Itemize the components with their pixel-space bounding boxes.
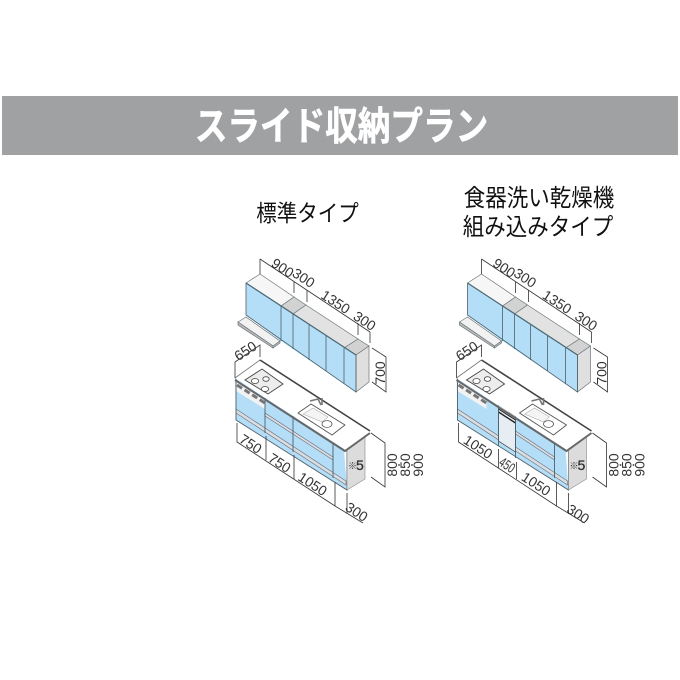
dimension labels: 300: [351, 308, 379, 334]
dimension labels: 800: [606, 453, 622, 477]
dimension labels: 1050: [295, 469, 330, 499]
heading: dishwasher type: [463, 179, 614, 242]
dimension labels: 1350: [318, 287, 353, 317]
dimension labels: 650: [231, 338, 260, 364]
dimension labels: 1050: [519, 469, 554, 499]
counter top: [456, 360, 592, 451]
dimension labels: 650: [453, 338, 481, 364]
heading: dishwasher type: 食器洗い乾燥機: [464, 179, 614, 213]
dimension labels: 5: [578, 457, 586, 473]
dimension labels: 1350: [540, 287, 575, 317]
sink and faucet: [298, 398, 345, 435]
heading: standard type: 標準タイプ: [256, 196, 359, 228]
heading: dishwasher type: 組み込みタイプ: [463, 208, 614, 242]
dimension labels: 5: [356, 457, 364, 473]
dimension labels: 700: [594, 361, 610, 385]
dimension labels: 450: [496, 454, 518, 476]
counter top: [235, 360, 370, 451]
dimension labels: 850: [397, 453, 413, 477]
wall cabinets: [246, 274, 369, 392]
dimension labels: 1050: [461, 432, 496, 462]
dimension lines: [235, 259, 386, 523]
dimension labels: 900: [632, 453, 648, 477]
dimension labels: ※: [348, 461, 357, 471]
dimension labels: 300: [511, 265, 540, 291]
panel: standard type kitchen: [231, 255, 426, 525]
cooktop: [245, 369, 283, 394]
wall cabinets: [468, 274, 590, 392]
base cabinet side panel: [568, 436, 586, 490]
dimension labels: 900: [490, 255, 519, 281]
title banner: [2, 95, 678, 155]
wall shelf: [238, 317, 280, 348]
dimension labels: ※: [570, 461, 579, 471]
title text: スライド収納プラン: [195, 95, 488, 152]
dimension labels: 300: [290, 265, 318, 291]
sink and faucet: [520, 398, 566, 435]
dimension labels: [453, 255, 648, 527]
dimension labels: 800: [384, 453, 400, 477]
dimension labels: 300: [564, 501, 593, 527]
dimension labels: 900: [410, 453, 426, 477]
base cabinet side panel: [347, 436, 365, 490]
dimension labels: 700: [372, 361, 388, 385]
dimension labels: 900: [269, 255, 297, 281]
dimension labels: 300: [572, 308, 601, 334]
cooktop: [466, 369, 504, 394]
dimension labels: 300: [343, 499, 371, 525]
dimension labels: 750: [266, 450, 294, 476]
dimension lines: [456, 259, 608, 523]
base cabinet fronts: [235, 378, 347, 490]
dimension labels: 750: [237, 431, 265, 457]
dimension labels: [231, 255, 426, 525]
wall shelf: [460, 317, 502, 348]
panel: dishwasher type kitchen: [453, 255, 648, 527]
base cabinet fronts: [456, 378, 568, 490]
dimension labels: 850: [618, 453, 634, 477]
